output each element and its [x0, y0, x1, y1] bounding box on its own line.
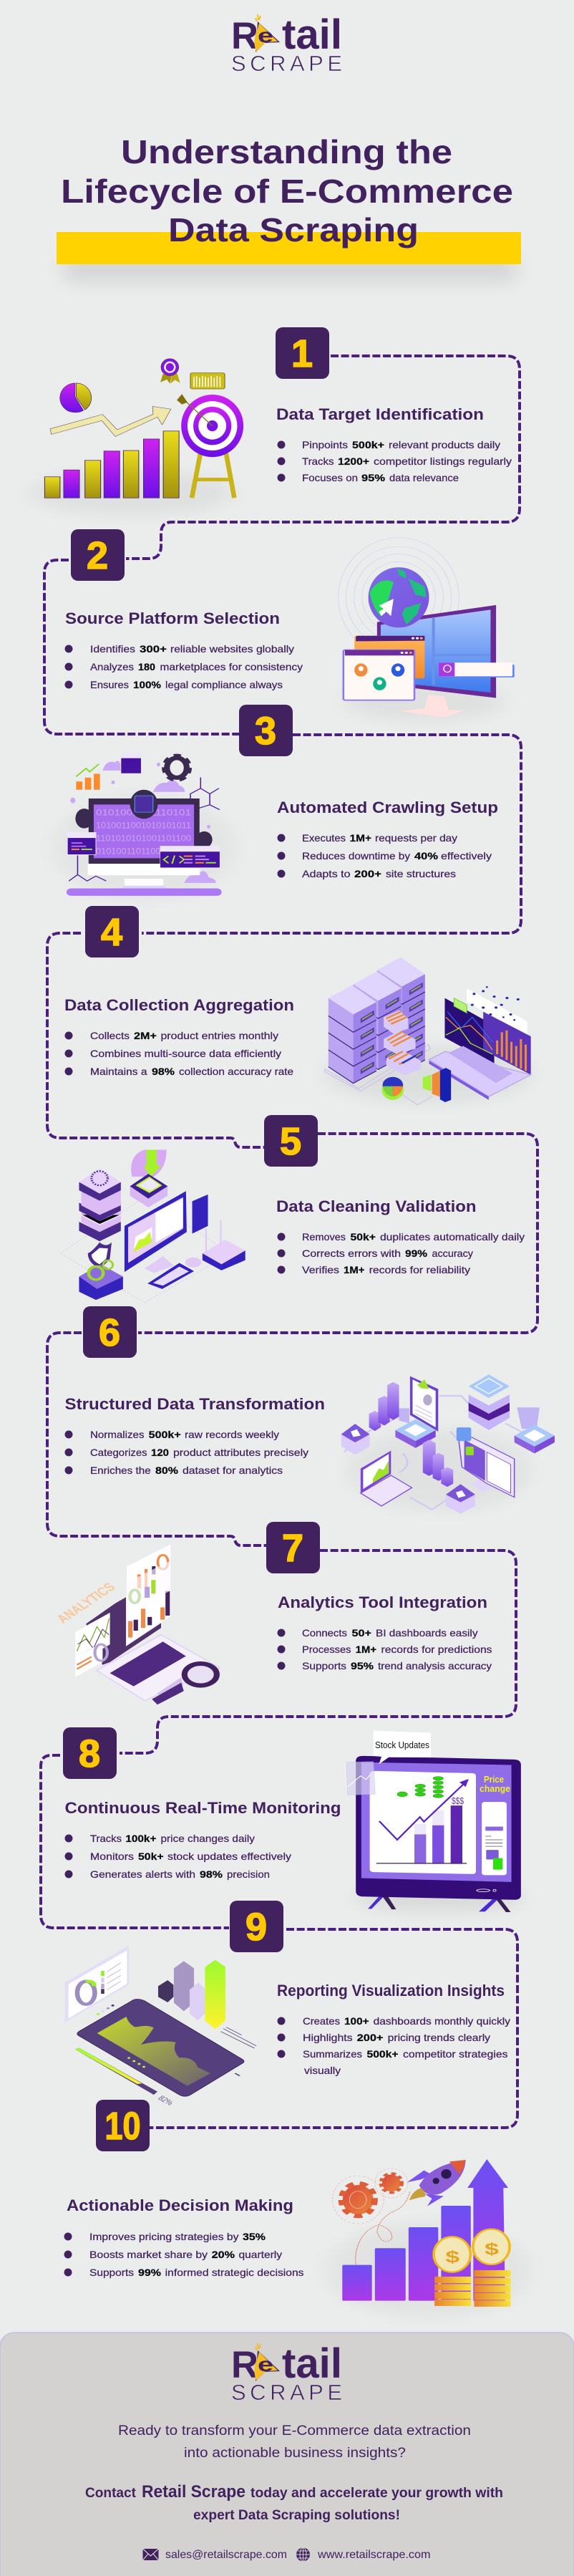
- panel: step 1 text: relevant products daily: [389, 439, 500, 450]
- panel: step 5 text: Data Cleaning Validation: [276, 1197, 477, 1215]
- step 5 badge: 5: [280, 1120, 301, 1163]
- panel: step 7 text: Processes: [302, 1644, 351, 1655]
- panel: step 2 text: Source Platform Selection: [65, 609, 280, 627]
- panel: step 5 text: [276, 1197, 525, 1275]
- panel: step 3 text: [277, 799, 498, 879]
- panel: step 6 text: raw records weekly: [185, 1429, 279, 1440]
- connector 7 to 8: [120, 1550, 516, 1753]
- panel: step 6 text: 500k+: [149, 1429, 181, 1440]
- step 8 badge: [63, 1727, 117, 1779]
- panel: step 5 text: Corrects errors with: [302, 1248, 401, 1259]
- illustration: target with rising bar chart: [29, 359, 243, 515]
- title underline bar with shadow: [57, 232, 521, 279]
- illustration: growth rocket, gears and coins: $: [485, 2241, 499, 2259]
- step 10 badge: [96, 2100, 150, 2151]
- panel: step 9 text: pricing trends clearly: [388, 2032, 490, 2043]
- panel: step 4 text: 98%: [152, 1066, 175, 1077]
- panel: step 5 text: 50k+: [351, 1231, 376, 1243]
- panel: step 3 text: 1M+: [349, 832, 371, 844]
- panel: step 9 text: visually: [304, 2065, 341, 2076]
- illustration: reporting visualization tablet: [65, 1946, 256, 2107]
- illustration: growth rocket, gears and coins: $: [445, 2248, 459, 2267]
- connector 8 to 9: [41, 1755, 229, 1928]
- panel: step 8 text: Continuous Real-Time Monitoring: [64, 1799, 341, 1817]
- connector 2 to 3: [44, 560, 239, 734]
- footer question: [118, 2423, 471, 2461]
- step 1 badge: [276, 327, 329, 379]
- panel: step 6 text: dataset for analytics: [183, 1465, 283, 1476]
- step 4 badge: [85, 906, 139, 957]
- panel: step 7 text: records for predictions: [381, 1644, 492, 1655]
- step 4 badge: 4: [101, 911, 122, 954]
- label: price change: change: [480, 1783, 510, 1794]
- label: dollar signs: $$$: [452, 1795, 464, 1806]
- step 7 badge: [266, 1522, 320, 1573]
- panel: step 10 text: quarterly: [239, 2249, 282, 2260]
- panel: step 6 text: Enriches the: [90, 1465, 151, 1476]
- panel: step 6 text: product attributes precisely: [173, 1447, 308, 1458]
- panel: step 6 text: Structured Data Transformation: [64, 1395, 325, 1413]
- panel: step 8 text: Generates alerts with: [90, 1868, 195, 1880]
- step 7 badge: 7: [282, 1527, 303, 1570]
- illustration: automated crawling monitor: 1101010101001101100: [96, 834, 191, 844]
- step 6 badge: [83, 1306, 137, 1358]
- panel: footer call to action: [0, 2333, 574, 2576]
- panel: step 5 text: 99%: [405, 1248, 428, 1259]
- step 2 badge: 2: [87, 534, 108, 577]
- connector 9 to 10: [150, 1929, 517, 2128]
- header logo: e: [258, 24, 273, 47]
- panel: step 9 text: Reporting Visualization Insights: [277, 1982, 505, 1999]
- panel: step 9 text: 500k+: [366, 2048, 398, 2060]
- illustration: analytics laptop and magnifier: ANALYTICS: [54, 1581, 119, 1626]
- panel: step 1 text: competitor listings regularly: [374, 455, 512, 467]
- panel: step 4 text: [64, 996, 294, 1077]
- panel: step 3 text: requests per day: [375, 832, 457, 844]
- panel: step 2 text: [64, 609, 303, 690]
- panel: step 5 text: records for reliability: [369, 1264, 470, 1275]
- panel: step 1 text: 95%: [361, 472, 386, 483]
- panel: step 3 text: Automated Crawling Setup: [277, 799, 498, 816]
- panel: step 7 text: [278, 1593, 492, 1671]
- panel: step 2 text: reliable websites globally: [170, 643, 294, 655]
- step 2 badge: [71, 529, 125, 581]
- panel: step 7 text: trend analysis accuracy: [378, 1660, 492, 1671]
- panel: step 9 text: dashboards monthly quickly: [374, 2015, 510, 2027]
- step 1 badge: 1: [291, 332, 313, 375]
- panel: step 5 text: Verifies: [302, 1264, 339, 1275]
- panel: step 10 text: [64, 2196, 303, 2278]
- illustration: automated crawling monitor: 1010011001010101011: [96, 821, 191, 831]
- panel: step 5 text: 1M+: [344, 1264, 365, 1275]
- panel: step 1 text: 1200+: [338, 455, 369, 467]
- panel: step 2 text: 180: [138, 661, 155, 672]
- footer logo: R: [231, 2344, 258, 2386]
- panel: step 10 text: informed strategic decisions: [165, 2267, 303, 2278]
- illustration: automated crawling monitor: 0101001101100101010: [96, 846, 191, 857]
- illustration: server racks and laptop: [325, 957, 531, 1105]
- panel: step 8 text: 50k+: [138, 1851, 164, 1862]
- panel: step 4 text: Combines multi-source data efficiently: [90, 1048, 281, 1059]
- footer logo: SCRAPE: [231, 2380, 342, 2405]
- panel: step 2 text: 100%: [133, 679, 162, 690]
- website address: www.retailscrape.com: [317, 2549, 431, 2561]
- panel: step 7 text: Connects: [302, 1627, 347, 1639]
- panel: step 5 text: Removes: [302, 1231, 346, 1243]
- panel: step 1 text: Pinpoints: [302, 439, 348, 450]
- illustration: structured data transformation network: [341, 1374, 555, 1514]
- footer question: Ready to transform your E-Commerce data extraction: [118, 2423, 471, 2438]
- panel: step 1 text: 500k+: [352, 439, 384, 450]
- illustration: real-time monitoring TV: [346, 1731, 523, 1912]
- panel: step 10 text: 20%: [212, 2249, 235, 2260]
- title: [61, 133, 513, 249]
- header logo: SCRAPE: [231, 51, 342, 76]
- connector 6 to 7: [47, 1333, 266, 1545]
- panel: step 1 text: [276, 405, 512, 483]
- panel: step 8 text: stock updates effectively: [167, 1851, 291, 1862]
- title: Understanding the: [121, 133, 452, 170]
- connector 1 to 2: [126, 356, 520, 559]
- illustration: globe and source platforms: [339, 538, 515, 720]
- footer logo: e: [258, 2353, 273, 2375]
- footer contact message: Contact: [85, 2486, 137, 2501]
- step 9 badge: [230, 1901, 283, 1952]
- footer question: into actionable business insights?: [184, 2446, 406, 2461]
- panel: step 2 text: Analyzes: [90, 661, 134, 672]
- panel: step 10 text: 35%: [243, 2231, 266, 2242]
- panel: step 10 text: Improves pricing strategies by: [89, 2231, 239, 2242]
- label: price change: Price: [484, 1774, 504, 1785]
- panel: step 6 text: Normalizes: [90, 1429, 145, 1440]
- panel: step 1 text: Tracks: [302, 455, 334, 467]
- header logo: tail: [282, 11, 342, 58]
- panel: step 3 text: Adapts to: [302, 868, 351, 879]
- connector 4 to 5: [47, 933, 264, 1147]
- panel: step 8 text: 98%: [200, 1868, 223, 1880]
- panel: step 9 text: 200+: [357, 2032, 384, 2043]
- panel: step 7 text: Supports: [302, 1660, 346, 1671]
- illustration: automated crawling monitor: 0101001101110101: [96, 809, 191, 818]
- panel: step 6 text: 120: [151, 1447, 169, 1458]
- panel: step 2 text: Ensures: [90, 679, 129, 690]
- step 10 badge: 10: [104, 2105, 140, 2148]
- panel: step 8 text: Tracks: [90, 1833, 122, 1844]
- connector 3 to 4: [142, 735, 521, 933]
- panel: step 5 text: accuracy: [432, 1248, 473, 1259]
- panel: step 9 text: Highlights: [303, 2032, 353, 2043]
- panel: step 3 text: site structures: [386, 868, 456, 879]
- footer contact message: today and accelerate your growth with: [250, 2486, 503, 2501]
- footer contact message: [85, 2482, 503, 2523]
- panel: step 8 text: [64, 1799, 341, 1880]
- panel: step 2 text: Identifies: [90, 643, 135, 655]
- panel: step 3 text: 40%: [414, 850, 439, 862]
- panel: step 7 text: BI dashboards easily: [376, 1627, 478, 1639]
- icon: envelope: [143, 2549, 159, 2560]
- panel: step 10 text: 99%: [138, 2267, 162, 2278]
- panel: step 2 text: 300+: [140, 643, 167, 655]
- panel: step 1 text: Focuses on: [302, 472, 358, 483]
- title: Data Scraping: [168, 211, 419, 249]
- header logo: R: [231, 15, 258, 57]
- label: stock updates: Stock Updates: [375, 1740, 429, 1750]
- panel: step 4 text: Data Collection Aggregation: [64, 996, 294, 1014]
- panel: step 6 text: 80%: [155, 1465, 179, 1476]
- panel: step 6 text: [64, 1395, 325, 1476]
- email address: sales@retailscrape.com: [165, 2549, 287, 2561]
- illustration: reporting visualization tablet: 82%: [156, 2094, 176, 2107]
- step 3 badge: [239, 705, 293, 756]
- panel: step 7 text: 95%: [351, 1660, 374, 1671]
- panel: step 10 text: Actionable Decision Making: [67, 2196, 293, 2214]
- panel: step 1 text: data relevance: [389, 472, 459, 483]
- panel: step 9 text: 100+: [344, 2015, 369, 2027]
- label: price change: [480, 1774, 510, 1794]
- illustration: data cleaning workstation: [60, 1149, 245, 1303]
- step 8 badge: 8: [79, 1732, 100, 1775]
- panel: step 9 text: Summarizes: [303, 2048, 362, 2060]
- icon: globe: [296, 2548, 310, 2561]
- title: Lifecycle of E-Commerce: [61, 173, 513, 210]
- panel: step 10 text: Boosts market share by: [89, 2249, 208, 2260]
- panel: step 9 text: competitor strategies: [403, 2048, 508, 2060]
- illustration: automated crawling monitor: [53, 753, 236, 899]
- panel: step 2 text: marketplaces for consistency: [160, 661, 303, 672]
- panel: step 4 text: collection accuracy rate: [179, 1066, 293, 1077]
- panel: step 2 text: legal compliance always: [165, 679, 283, 690]
- connector 5 to 6: [138, 1134, 537, 1333]
- illustration: growth rocket, gears and coins: [326, 2159, 531, 2318]
- panel: step 8 text: Monitors: [90, 1851, 134, 1862]
- panel: step 3 text: Reduces downtime by: [302, 850, 410, 862]
- panel: step 9 text: Creates: [303, 2015, 340, 2027]
- panel: step 3 text: Executes: [302, 832, 346, 844]
- footer contact message: Retail Scrape: [142, 2482, 245, 2502]
- panel: step 6 text: Categorizes: [90, 1447, 147, 1458]
- step 6 badge: 6: [99, 1311, 120, 1354]
- panel: step 3 text: 200+: [354, 868, 381, 879]
- panel: step 5 text: duplicates automatically daily: [380, 1231, 525, 1243]
- header logo: [231, 11, 342, 76]
- panel: step 4 text: Collects: [90, 1030, 130, 1041]
- panel: step 9 text: [277, 1982, 510, 2076]
- panel: step 8 text: 100k+: [125, 1833, 156, 1844]
- panel: step 3 text: effectively: [441, 850, 492, 862]
- panel: step 10 text: Supports: [89, 2267, 134, 2278]
- illustration: analytics laptop and magnifier: [54, 1544, 220, 1704]
- footer logo: [231, 2340, 342, 2405]
- panel: step 7 text: 50+: [352, 1627, 371, 1639]
- panel: step 7 text: Analytics Tool Integration: [278, 1593, 487, 1611]
- panel: step 8 text: price changes daily: [160, 1833, 255, 1844]
- panel: step 4 text: Maintains a: [90, 1066, 147, 1077]
- panel: step 7 text: 1M+: [356, 1644, 376, 1655]
- footer contact message: expert Data Scraping solutions!: [193, 2508, 400, 2523]
- step 5 badge: [264, 1115, 318, 1167]
- panel: step 1 text: Data Target Identification: [276, 405, 484, 423]
- panel: step 8 text: precision: [227, 1868, 270, 1880]
- step 9 badge: 9: [245, 1906, 267, 1949]
- footer logo: tail: [282, 2340, 342, 2387]
- step 3 badge: 3: [255, 710, 276, 753]
- panel: step 4 text: product entries monthly: [160, 1030, 278, 1041]
- panel: step 4 text: 2M+: [134, 1030, 157, 1041]
